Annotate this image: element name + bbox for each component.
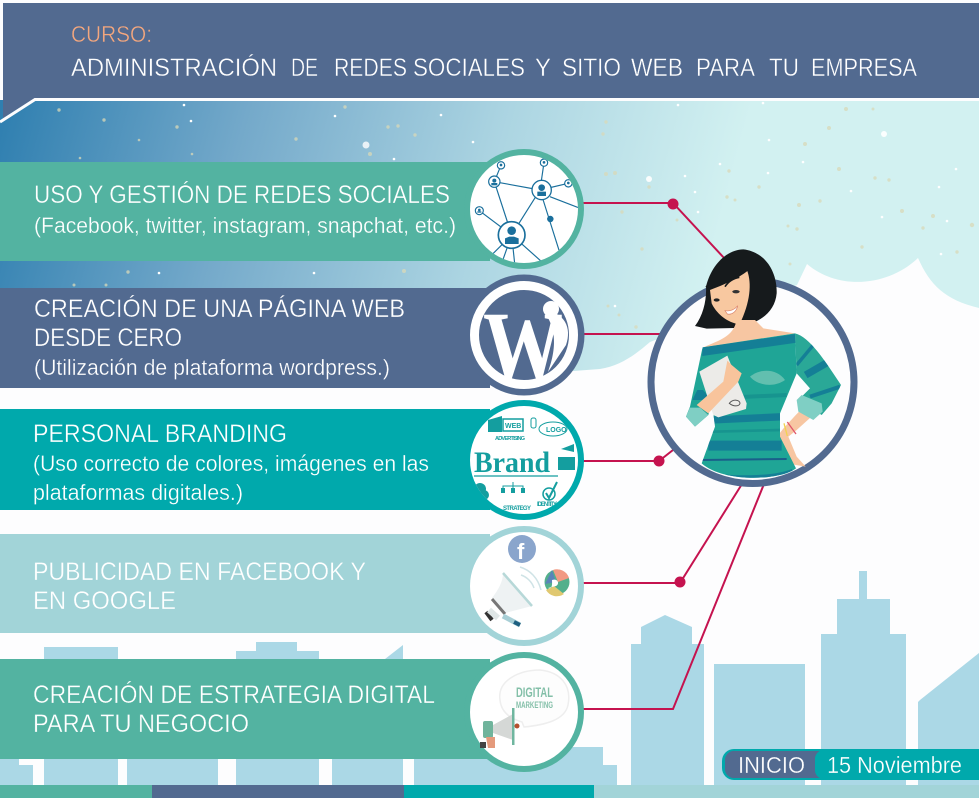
icon: brand: WEB — [505, 423, 521, 430]
forearm and hand — [777, 411, 811, 467]
start date badge: 15 Noviembre — [827, 752, 962, 778]
panel: pagina web: DESDE CERO — [34, 324, 182, 352]
tablet — [699, 356, 747, 417]
panel: redes sociales — [0, 149, 584, 269]
panel: pagina web — [0, 274, 584, 402]
course title — [71, 53, 917, 82]
start date badge — [722, 749, 979, 780]
icon: brand: IDENTITY — [537, 502, 557, 508]
panel: personal branding: plataformas digitales.) — [33, 480, 243, 505]
icon: social network — [464, 149, 584, 269]
panel: redes sociales: (Facebook, twitter, instagram, snapchat, etc.) — [34, 213, 456, 238]
left arm — [686, 348, 720, 427]
hand on tablet — [697, 361, 742, 413]
torso — [700, 333, 797, 478]
panel: personal branding — [0, 400, 584, 520]
icon: digital marketing: DIGITAL — [516, 684, 553, 700]
course title: REDES — [334, 54, 407, 82]
course title: SITIO — [562, 54, 621, 82]
start date badge: INICIO — [738, 752, 805, 778]
course title: TU — [769, 54, 799, 82]
course title: WEB — [631, 54, 683, 82]
cuff — [797, 395, 823, 420]
city skyline — [0, 571, 979, 785]
panel: personal branding: (Uso correcto de colores, imágenes en las — [33, 451, 429, 476]
panel: pagina web: (Utilización de plataforma wordpress.) — [34, 355, 390, 380]
icon: brand: Brand — [474, 446, 550, 479]
panel: personal branding: PERSONAL BRANDING — [33, 420, 287, 448]
character circle — [651, 249, 854, 484]
neck and shoulders — [703, 320, 795, 347]
course title: SOCIALES — [413, 54, 525, 82]
header banner — [0, 3, 979, 122]
icon: megaphone with facebook and google — [464, 526, 584, 646]
panel: estrategia digital: PARA TU NEGOCIO — [33, 710, 249, 738]
icon: brand: STRATEGY — [503, 506, 531, 512]
icon: brand — [464, 400, 584, 520]
icon: wordpress: W — [483, 291, 563, 402]
panel: estrategia digital — [0, 652, 584, 772]
panel: publicidad: EN GOOGLE — [33, 587, 176, 615]
panel: publicidad: PUBLICIDAD EN FACEBOOK Y — [33, 558, 366, 586]
panel: redes sociales: USO Y GESTIÓN DE REDES SOCIALES — [34, 180, 450, 209]
icon: brand: ADVERTISING — [495, 436, 525, 442]
icon: megaphone with facebook and google: f — [517, 539, 525, 564]
face — [710, 271, 750, 325]
character: woman holding tablet — [686, 249, 841, 479]
icon: digital marketing: MARKETING — [516, 700, 553, 710]
star dots — [57, 102, 974, 329]
icon: brand: LOGO — [546, 427, 567, 434]
panel: pagina web: CREACIÓN DE UNA PÁGINA WEB — [34, 294, 405, 323]
icon: digital marketing — [464, 652, 584, 772]
course title: EMPRESA — [811, 54, 917, 82]
course title: PARA — [696, 54, 755, 82]
course title: DE — [291, 54, 318, 82]
panel: publicidad — [0, 526, 584, 646]
connector lines — [580, 198, 764, 709]
course label: CURSO: — [71, 21, 152, 47]
right sleeve — [795, 333, 841, 415]
course title: ADMINISTRACIÓN — [71, 53, 277, 82]
course title: Y — [535, 54, 551, 82]
hair — [695, 249, 777, 329]
panel: estrategia digital: CREACIÓN DE ESTRATEGIA DIGITAL — [33, 680, 435, 709]
bottom colour strip — [0, 785, 979, 798]
